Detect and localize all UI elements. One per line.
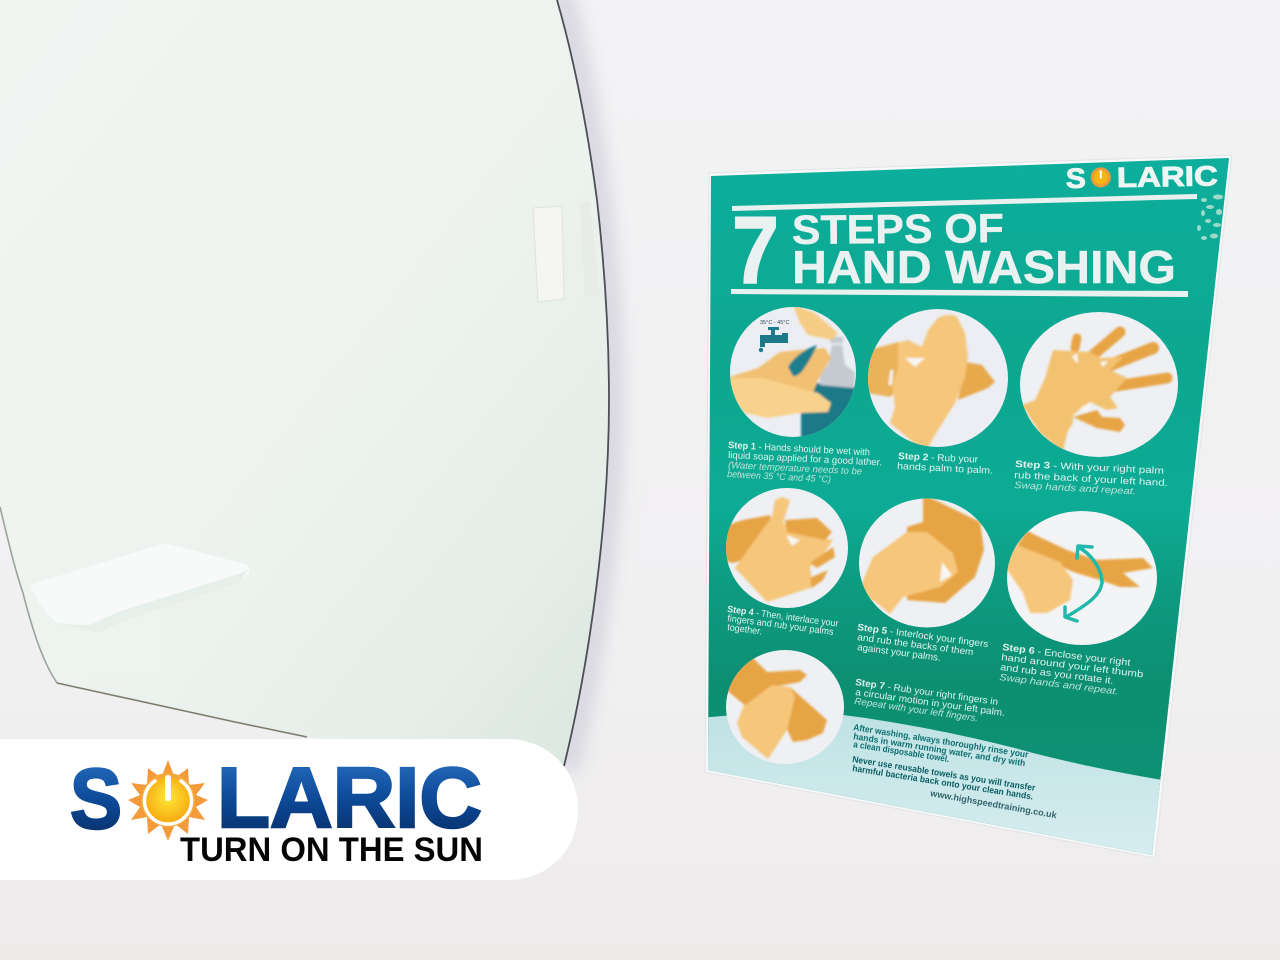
step 3 illustration (1020, 312, 1178, 457)
step 6 text: and rub as you rotate it. (1000, 662, 1114, 687)
footer advice (852, 722, 1058, 820)
reflected light switch (533, 206, 564, 302)
footer wave (708, 715, 1160, 855)
footer advice: harmful bacteria back onto your clean hands. (852, 763, 1034, 802)
step 7 text: Repeat with your left fingers. (854, 696, 979, 724)
step 7 text: Step 7 - Rub your right fingers in (855, 677, 999, 708)
step 5 illustration (858, 494, 995, 628)
poster logo: S (1066, 163, 1086, 194)
step 5 text: against your palms. (857, 642, 941, 664)
brand banner: LARIC (217, 751, 482, 846)
poster (700, 158, 1229, 870)
footer advice: www.highspeedtraining.co.uk (929, 788, 1058, 820)
poster lamination (705, 155, 1232, 858)
step 4 text: fingers and rub your palms (727, 613, 834, 638)
icon: power sun (128, 760, 208, 841)
step 5 text: Step 5 - Interlock your fingers (857, 622, 989, 650)
step 1 text: Step 1 - Hands should be wet with (728, 440, 870, 458)
top rule (732, 194, 1197, 211)
footer advice: After washing, always thoroughly rinse your (853, 722, 1030, 760)
step 2 text: Step 2 - Rub your (898, 451, 978, 465)
mirror (0, 0, 609, 766)
step 1 text (727, 440, 882, 485)
step 5 text: and rub the backs of them (857, 632, 974, 658)
tagline: TURN ON THE SUN (180, 831, 483, 869)
step 2 text: hands palm to palm. (897, 461, 993, 477)
reflected second plate (580, 201, 600, 298)
title: 7 (732, 197, 779, 304)
speckled damage (1197, 194, 1223, 240)
title: STEPS OF (792, 205, 1004, 253)
step 3 text: rub the back of your left hand. (1014, 470, 1168, 489)
step 6 text: Step 6 - Enclose your right (1002, 642, 1131, 669)
step 3 text: Swap hands and repeat. (1014, 480, 1136, 497)
footer advice: Never use reusable towels as you will transfer (852, 754, 1036, 793)
step 6 illustration (1006, 511, 1157, 645)
step 3 text (1014, 459, 1168, 497)
step 7 text (854, 677, 1006, 724)
footer advice: hands in warm running water, and dry with (853, 731, 1026, 768)
icon: rotation arrow (1065, 546, 1102, 621)
step 4 text: together. (727, 622, 763, 638)
reflected soap dish (30, 543, 250, 680)
step 2 illustration (862, 309, 1008, 452)
step 6 text (999, 642, 1144, 698)
footer advice: a clean disposable towel. (853, 739, 950, 764)
step 1 illustration (726, 305, 860, 440)
step 1 illustration: 35°C - 45°C (760, 320, 789, 326)
step 1 text: liquid soap applied for a good lather. (728, 450, 882, 469)
title: HAND WASHING (792, 241, 1176, 293)
step 4 text: Step 4 - Then, interlace your (727, 604, 839, 630)
step 7 text: a circular motion in your left palm. (855, 687, 1006, 719)
step 3 text: Step 3 - With your right palm (1015, 459, 1164, 477)
step 4 illustration (722, 488, 848, 608)
step 1 text: (Water temperature needs to be (728, 460, 862, 478)
title (732, 197, 1176, 304)
poster logo (1066, 160, 1218, 194)
poster logo: LARIC (1117, 160, 1218, 193)
step 7 illustration (724, 650, 844, 764)
step 1 text: between 35 °C and 45 °C) (727, 469, 831, 485)
step 2 text (897, 451, 993, 477)
step 6 text: Swap hands and repeat. (999, 672, 1119, 698)
step 6 text: hand around your left thumb (1001, 652, 1144, 680)
step 5 text (857, 622, 989, 664)
brand banner (0, 739, 578, 880)
logo wordmark: S (70, 752, 122, 847)
bottom title rule (731, 289, 1188, 297)
